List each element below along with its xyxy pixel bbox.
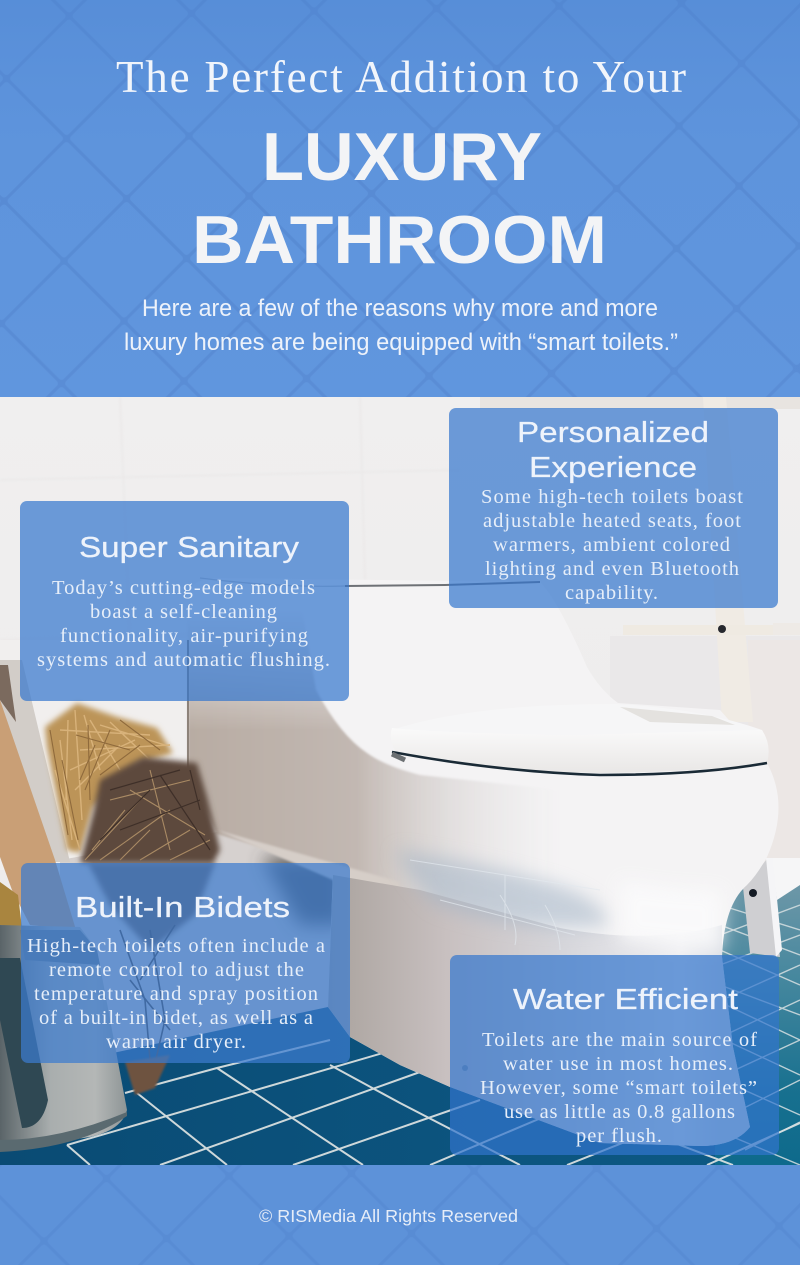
body text: water use in most homes. bbox=[503, 1053, 733, 1075]
heading: Personalized Experience bbox=[517, 417, 709, 484]
heading: Personalized Experience: Personalized bbox=[517, 417, 709, 449]
sub: dried straw brush bbox=[45, 703, 220, 863]
title line: The Perfect Addition to Your: The Perfect Addition to Your bbox=[116, 52, 686, 102]
heading: Super Sanitary: Super Sanitary bbox=[79, 532, 300, 564]
footer background: blue tiled panel bbox=[0, 1165, 800, 1265]
body text: lighting and even Bluetooth bbox=[485, 558, 739, 580]
panel: Super Sanitary bbox=[20, 501, 349, 701]
sub: toilet seat lid bbox=[391, 704, 769, 775]
subtitle text block: Here are a few of the reasons why more and more bbox=[142, 295, 658, 322]
header background: blue tiled panel bbox=[0, 0, 800, 397]
photo: white toilet in a bathroom with blue tiled floor bbox=[0, 397, 800, 1165]
title: LUXURY BATHROOM bbox=[192, 119, 607, 278]
panel: Personalized Experience bbox=[449, 408, 778, 608]
body text: warm air dryer. bbox=[106, 1031, 246, 1053]
sub: floor reflection on bowl bbox=[395, 850, 722, 950]
title: LUXURY BATHROOM: BATHROOM bbox=[192, 202, 607, 278]
sub: blue tile floor bbox=[0, 1007, 715, 1165]
body text: boast a self-cleaning bbox=[90, 601, 277, 623]
sub: pedestal shading bbox=[328, 875, 750, 1146]
sub: straw bundle at far left bbox=[0, 882, 22, 928]
sub: dark top corner of newspaper bbox=[0, 665, 16, 722]
body text: capability. bbox=[565, 582, 658, 604]
sub: toilet tank, bowl and pedestal silhouette bbox=[328, 697, 778, 1146]
sub: water-line hole on base bbox=[462, 1065, 468, 1071]
sub: floor grout lines bbox=[67, 1040, 800, 1165]
sub: white stool upper leg and shelf bbox=[623, 608, 773, 636]
body text: adjustable heated seats, foot bbox=[483, 510, 741, 532]
panel: Water Efficient bbox=[450, 955, 779, 1155]
body text: functionality, air-purifying bbox=[60, 625, 308, 647]
body text bbox=[481, 486, 743, 604]
body text: of a built-in bidet, as well as a bbox=[39, 1007, 313, 1029]
sub: metal bucket bbox=[0, 925, 127, 1152]
body text: per flush. bbox=[576, 1125, 662, 1147]
body text: systems and automatic flushing. bbox=[37, 649, 330, 671]
body text bbox=[480, 1029, 757, 1147]
body text: Some high-tech toilets boast bbox=[481, 486, 743, 508]
body text: temperature and spray position bbox=[34, 983, 318, 1005]
body text: Toilets are the main source of bbox=[482, 1029, 757, 1051]
body text: Today’s cutting-edge models bbox=[52, 577, 315, 599]
sub: tank seam line bbox=[188, 578, 540, 770]
title: LUXURY BATHROOM: LUXURY bbox=[262, 119, 542, 195]
sub: newspaper bbox=[0, 660, 70, 862]
body text bbox=[27, 935, 325, 1053]
subtitle text block bbox=[124, 295, 678, 356]
sub: brush wisps beneath panel bbox=[88, 863, 215, 1095]
heading: Built-In Bidets: Built-In Bidets bbox=[75, 892, 290, 924]
body text bbox=[37, 577, 330, 671]
body text: use as little as 0.8 gallons bbox=[504, 1101, 735, 1123]
heading: Water Efficient: Water Efficient bbox=[513, 984, 738, 1016]
heading: Personalized Experience: Experience bbox=[529, 452, 697, 484]
body text: warmers, ambient colored bbox=[493, 534, 730, 556]
sub: white stool lower leg bbox=[743, 858, 800, 957]
body text: High-tech toilets often include a bbox=[27, 935, 325, 957]
sub: cardboard tube bbox=[0, 700, 76, 930]
panel: Built-In Bidets bbox=[21, 863, 350, 1063]
sub: wall beside toilet base bbox=[60, 832, 330, 964]
body text: However, some “smart toilets” bbox=[480, 1077, 757, 1099]
copyright footer text: © RISMedia All Rights Reserved bbox=[259, 1206, 518, 1226]
subtitle text block: luxury homes are being equipped with “smart toilets.” bbox=[124, 329, 678, 356]
body text: remote control to adjust the bbox=[49, 959, 304, 981]
sub: shaded left of toilet body bbox=[186, 650, 506, 902]
